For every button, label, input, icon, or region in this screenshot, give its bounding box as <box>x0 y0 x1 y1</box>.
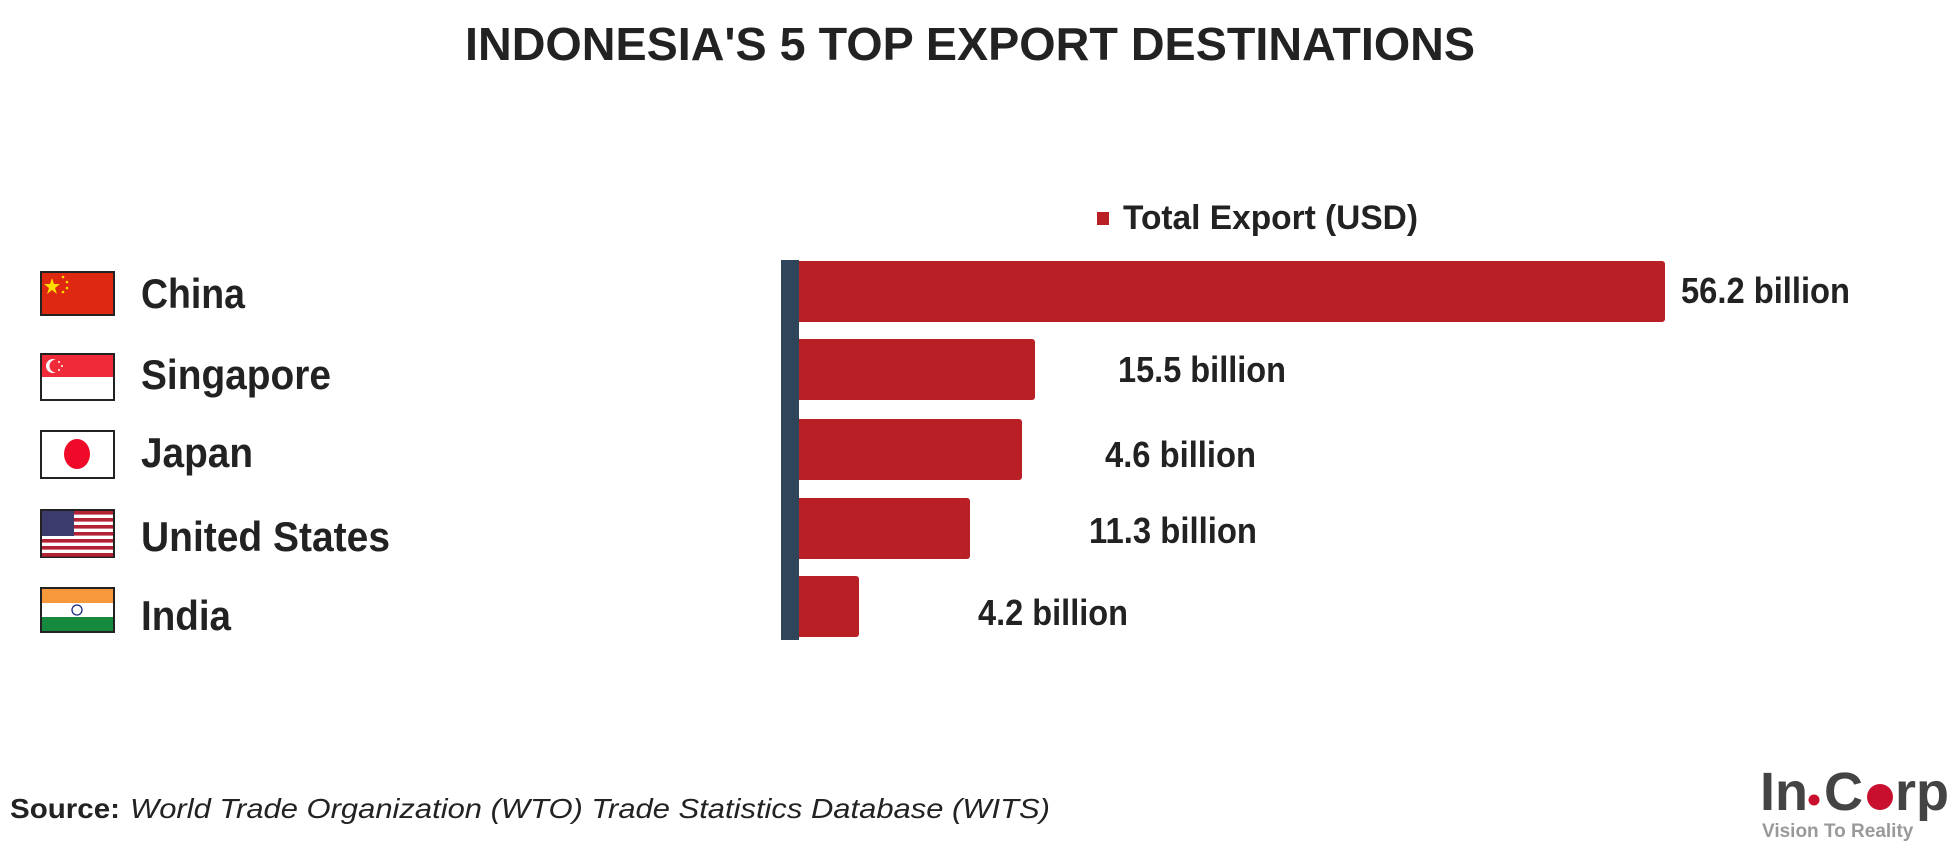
label: Japan: Japan <box>141 429 253 476</box>
country list <box>41 270 390 639</box>
title: INDONESIA'S 5 TOP EXPORT DESTINATIONS <box>465 18 1475 70</box>
logo: rp <box>1895 762 1949 822</box>
flag: Japan <box>41 431 114 478</box>
axis <box>781 260 799 640</box>
icon: globe <box>1867 784 1893 810</box>
label: India: India <box>141 592 232 639</box>
flag: Singapore <box>41 354 114 400</box>
source: World Trade Organization (WTO) Trade Statistics Database (WITS) <box>130 793 1050 824</box>
label: United States: United States <box>141 513 390 560</box>
flag: United States <box>41 510 114 557</box>
bar: Singapore <box>796 339 1035 400</box>
value: China: 56.2 billion <box>1681 270 1850 311</box>
bar: India <box>796 576 859 637</box>
bar: China <box>796 261 1665 322</box>
value: United States: 11.3 billion <box>1089 510 1257 551</box>
bar: Japan <box>796 419 1022 480</box>
label: Singapore: Singapore <box>141 351 331 398</box>
logo <box>1760 762 1949 842</box>
bar: United States <box>796 498 970 559</box>
value: Singapore: 15.5 billion <box>1118 349 1286 390</box>
logo: Vision To Reality <box>1762 821 1914 842</box>
bar chart <box>781 260 1850 640</box>
value: India: 4.2 billion <box>978 592 1128 633</box>
value: Japan: 4.6 billion <box>1105 434 1256 475</box>
flag: China <box>41 272 114 315</box>
source: Source: <box>10 793 120 824</box>
logo: C <box>1824 762 1863 822</box>
logo: In <box>1760 762 1808 822</box>
flag: India <box>41 588 114 632</box>
label: China: China <box>141 270 246 317</box>
legend: Total Export (USD) <box>1123 199 1418 237</box>
